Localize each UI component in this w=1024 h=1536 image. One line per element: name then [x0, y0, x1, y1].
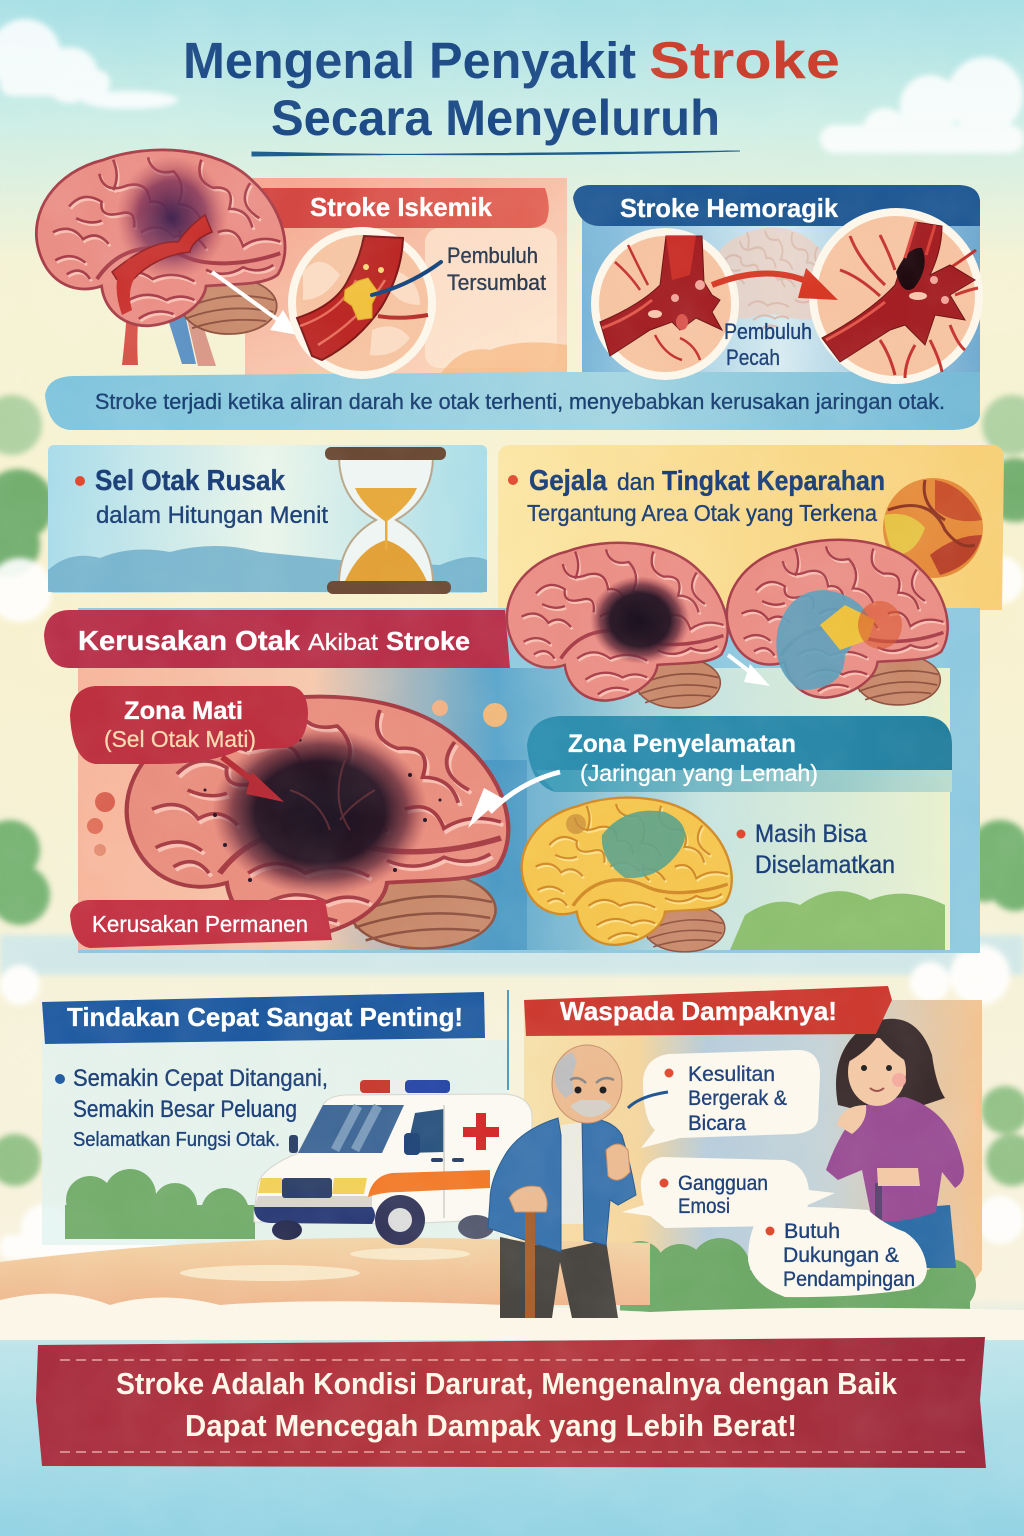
panel: gejala — [498, 445, 1004, 610]
icon: worried woman — [826, 1019, 964, 1268]
heading: stroke hemoragik: Stroke Hemoragik — [620, 193, 839, 223]
panel: stroke hemoragik — [573, 185, 980, 377]
panel: sel otak rusak — [48, 445, 487, 593]
icon: brain with dark lesion — [507, 543, 728, 708]
panel: tindakan cepat — [42, 990, 509, 1245]
panel: gejala: Tingkat Keparahan — [662, 465, 885, 496]
ghost brain — [711, 227, 835, 330]
panel: waspada backdrop — [524, 1000, 982, 1316]
mid clouds — [0, 556, 1024, 1259]
heading: kerusakan otak: Akibat — [308, 629, 379, 655]
arrow: to rescue zone — [468, 772, 560, 828]
panel: stroke iskemik — [245, 178, 567, 378]
callout: zona mati: Zona Mati — [124, 697, 243, 725]
title: Mengenal Penyakit — [183, 32, 636, 89]
callout: butuh dukungan — [748, 1207, 927, 1297]
panel: tindakan cepat: Semakin Besar Peluang — [73, 1096, 297, 1123]
icon: ruptured vessel circle large — [813, 212, 979, 380]
icon: yellow brain — [522, 798, 732, 952]
title: Secara Menyeluruh — [271, 90, 720, 146]
panel heading: waspada — [524, 986, 892, 1036]
callout: zona penyelamatan: Zona Penyelamatan — [568, 730, 796, 758]
text: masih bisa diselamatkan — [736, 820, 895, 879]
panel: kerusakan otak — [78, 608, 980, 953]
icon: ruptured vessel circle small — [595, 232, 735, 376]
icon: old man with cane — [488, 1045, 636, 1318]
callout: kesulitan bergerak: Bergerak & — [688, 1087, 787, 1110]
callout: gangguan emosi — [622, 1157, 835, 1228]
text: masih bisa diselamatkan: Diselamatkan — [755, 851, 895, 879]
callout: kesulitan bergerak — [628, 1050, 820, 1148]
icon: hourglass — [325, 447, 451, 594]
label: pembuluh pecah: Pembuluh — [724, 319, 812, 344]
heading: stroke iskemik — [262, 188, 549, 228]
icon: large brain with artery — [36, 150, 298, 366]
band: definisi — [45, 372, 980, 430]
side foliage — [0, 395, 1024, 1186]
panel: sel otak rusak: dalam Hitungan Menit — [96, 502, 328, 529]
panel: tindakan cepat: Tindakan Cepat Sangat Penting! — [67, 1002, 463, 1032]
label: pembuluh pecah: Pecah — [726, 345, 780, 370]
heading: stroke hemoragik — [573, 185, 980, 226]
callout: zona mati — [70, 686, 308, 764]
callout: gangguan emosi: Emosi — [678, 1195, 730, 1218]
text: masih bisa diselamatkan: Masih Bisa — [755, 820, 867, 848]
callout: zona mati: (Sel Otak Mati) — [104, 726, 256, 752]
label: pembuluh pecah — [724, 319, 812, 370]
icon: big damaged brain — [127, 697, 508, 948]
panel: gejala: Gejala — [529, 465, 608, 497]
clouds top — [0, 19, 1024, 153]
panel: tindakan cepat: Selamatkan Fungsi Otak. — [73, 1129, 280, 1151]
callout: butuh dukungan: Butuh — [784, 1220, 840, 1243]
panel: tindakan cepat: Semakin Cepat Ditangani, — [73, 1065, 328, 1092]
callout: butuh dukungan: Pendampingan — [783, 1268, 915, 1291]
footer banner: Dapat Mencegah Dampak yang Lebih Berat! — [185, 1408, 797, 1443]
callout: butuh dukungan: Dukungan & — [783, 1244, 899, 1267]
band: definisi: Stroke terjadi ketika aliran darah ke otak terhenti, menyebabkan kerusakan jaringan otak. — [95, 389, 945, 414]
heading: kerusakan otak: Stroke — [386, 626, 470, 656]
callout: zona penyelamatan: (Jaringan yang Lemah) — [580, 760, 818, 786]
icon: ambulance — [254, 1080, 532, 1245]
road and foliage — [0, 1169, 650, 1305]
label: kerusakan permanen — [70, 900, 332, 948]
icon: brain area map — [883, 478, 983, 578]
callout: gangguan emosi: Gangguan — [678, 1172, 768, 1195]
icon: brain with affected area — [727, 540, 948, 705]
callout: kesulitan bergerak: Kesulitan — [688, 1063, 775, 1086]
footer banner — [36, 1337, 986, 1468]
panel heading: waspada: Waspada Dampaknya! — [560, 996, 837, 1026]
callout: kesulitan bergerak: Bicara — [688, 1112, 746, 1135]
label: kerusakan permanen: Kerusakan Permanen — [92, 911, 308, 937]
bottom clouds — [0, 1294, 1024, 1340]
label: pembuluh tersumbat: Pembuluh — [447, 243, 538, 268]
heading: kerusakan otak: Kerusakan Otak — [78, 625, 300, 656]
label: pembuluh tersumbat: Tersumbat — [447, 270, 546, 295]
heading: kerusakan otak — [44, 610, 510, 668]
panel: sel otak rusak: Sel Otak Rusak — [95, 465, 286, 497]
arrow: rupture progression — [712, 268, 838, 300]
label: pembuluh tersumbat — [447, 243, 546, 295]
footer banner: Stroke Adalah Kondisi Darurat, Mengenalnya dengan Baik — [116, 1366, 898, 1401]
arrow: to dead zone — [222, 757, 284, 802]
callout: zona penyelamatan — [527, 716, 952, 792]
panel: gejala: dan — [617, 469, 655, 496]
title — [183, 32, 840, 146]
title: Stroke — [649, 32, 840, 90]
icon: clot vessel circle — [292, 231, 441, 375]
heading: stroke iskemik: Stroke Iskemik — [310, 192, 493, 222]
panel: gejala: Tergantung Area Otak yang Terkena — [527, 500, 877, 526]
